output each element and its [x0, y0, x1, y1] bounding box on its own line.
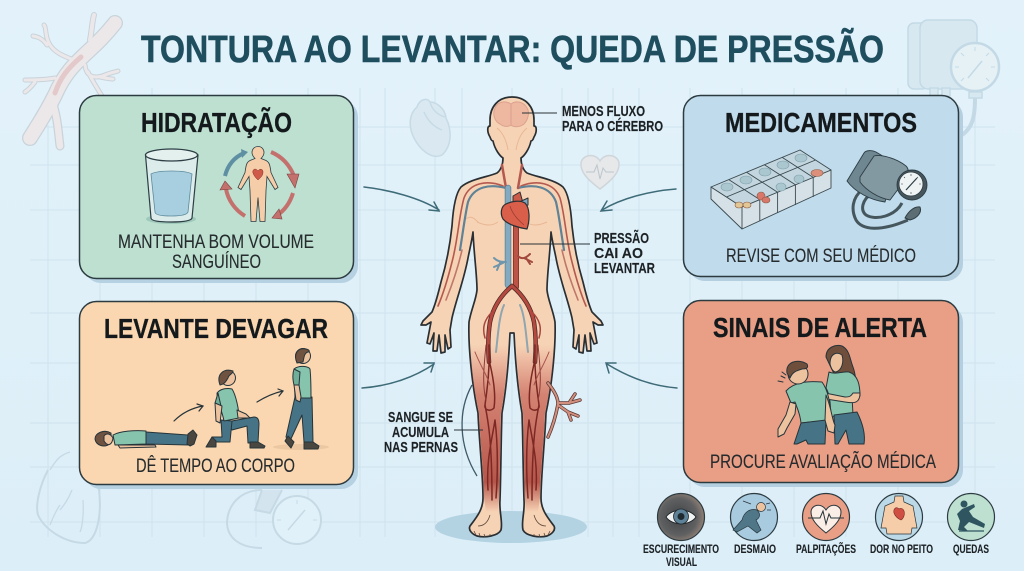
- panel: medicamentos: [684, 96, 963, 281]
- human body anatomy: [421, 97, 603, 537]
- arrow: kneeling to standing: [257, 389, 283, 402]
- icon: blood pressure monitor: [847, 151, 927, 228]
- label: sangue se acumula nas pernas: [384, 385, 483, 476]
- panel: levante devagar: [80, 302, 358, 489]
- title: TONTURA AO LEVANTAR: QUEDA DE PRESSÃO: [141, 27, 884, 71]
- label: sangue se acumula nas pernas: ACUMULA: [392, 424, 449, 441]
- leg veins: [475, 345, 549, 500]
- symptom: dor no peito: DOR NO PEITO: [870, 542, 933, 556]
- watermark: blood pressure cuff: [908, 20, 999, 135]
- arm arteries: [438, 165, 586, 306]
- watermark: anatomical heart: [410, 99, 450, 156]
- symptom: escurecimento visual: ESCURECIMENTO: [643, 542, 719, 556]
- label: pressão cai ao levantar: PRESSÃO: [594, 229, 649, 247]
- watermark: heart with pulse: [581, 155, 619, 189]
- label: pressão cai ao levantar: LEVANTAR: [594, 260, 655, 277]
- heading: sinais de alerta: SINAIS DE ALERTA: [713, 312, 927, 343]
- heart: [501, 192, 529, 229]
- arrow: hidratação to body: [364, 187, 439, 211]
- symptom: palpitações: PALPITAÇÕES: [796, 541, 856, 556]
- text: mantenha bom volume: [118, 232, 314, 273]
- arrow: sinais to body: [606, 363, 677, 388]
- symptom: escurecimento visual: [643, 494, 719, 569]
- symptom: desmaio: [730, 494, 778, 556]
- floor shadow: [435, 511, 587, 543]
- text: dê tempo ao corpo: DÊ TEMPO AO CORPO: [136, 455, 295, 477]
- heading: medicamentos: MEDICAMENTOS: [725, 107, 917, 138]
- leg vein callout: [548, 383, 580, 437]
- label: sangue se acumula nas pernas: NAS PERNAS: [384, 439, 458, 456]
- heading: hidratação: HIDRATAÇÃO: [141, 107, 292, 138]
- text: revise com seu médico: REVISE COM SEU MÉDICO: [726, 246, 916, 267]
- label: menos fluxo para o cérebro: MENOS FLUXO: [562, 103, 645, 120]
- text: procure avaliação médica: PROCURE AVALIAÇÃO MÉDICA: [710, 451, 936, 473]
- leg blood pooling: [470, 345, 554, 512]
- icon: person standing: [273, 348, 329, 450]
- body silhouette: [421, 97, 603, 537]
- text: mantenha bom volume: SANGUÍNEO: [172, 252, 261, 273]
- heading: levante devagar: LEVANTE DEVAGAR: [104, 313, 328, 344]
- brain: [494, 102, 528, 127]
- arrow: levante to body: [362, 363, 434, 388]
- icon: person lying: [95, 430, 197, 448]
- watermark: gauge bottom: [227, 490, 321, 548]
- icon: body with circular arrows: [220, 146, 299, 222]
- panel: sinais de alerta: [684, 300, 963, 487]
- symptom: quedas: [948, 494, 994, 556]
- icon: woman helping man: [778, 345, 864, 444]
- label: menos fluxo para o cérebro: [522, 103, 663, 135]
- central vessels: [484, 188, 540, 362]
- label: sangue se acumula nas pernas: SANGUE SE: [388, 409, 453, 426]
- icon: glass of water: [146, 149, 198, 224]
- symptom: escurecimento visual: VISUAL: [666, 555, 697, 569]
- label: menos fluxo para o cérebro: PARA O CÉREBRO: [562, 118, 663, 135]
- face and torso details: [464, 128, 547, 225]
- symptom: desmaio: DESMAIO: [734, 542, 776, 556]
- symptom: palpitações: [796, 494, 856, 556]
- symptom: dor no peito: [870, 494, 933, 556]
- arrow: medicamentos to body: [601, 189, 676, 211]
- icon: person kneeling: [206, 370, 265, 448]
- panel: hidratação: [80, 96, 358, 283]
- text: mantenha bom volume: MANTENHA BOM VOLUME: [118, 232, 314, 253]
- arrow: lying to kneeling: [174, 404, 203, 421]
- label: pressão cai ao levantar: [520, 229, 655, 277]
- watermark: blood vessel: [25, 15, 118, 146]
- watermark: outlined heart bottom left: [37, 452, 100, 543]
- label: pressão cai ao levantar: CAI AO: [594, 245, 643, 262]
- icon: pill organizer: [711, 150, 831, 229]
- symptom: quedas: QUEDAS: [953, 542, 989, 556]
- toes and foot details: [474, 515, 550, 537]
